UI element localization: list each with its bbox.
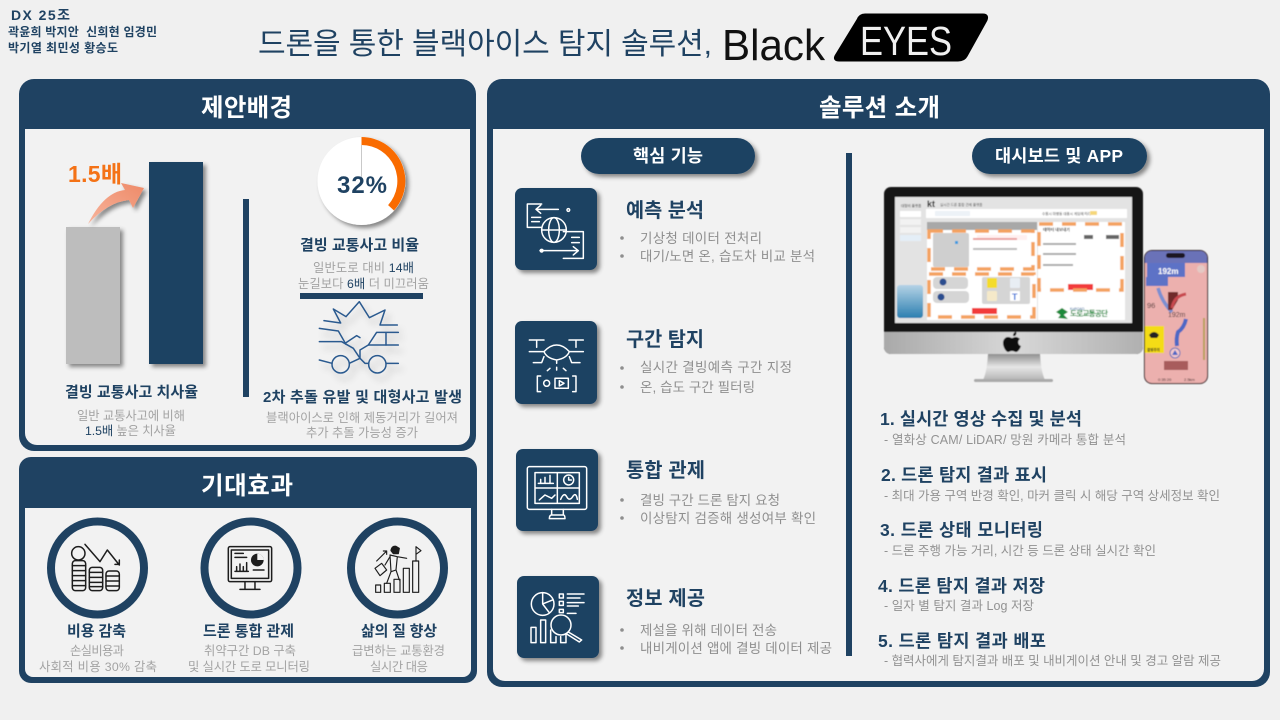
panel: 솔루션 소개 (487, 79, 1270, 687)
donut chart: 32% (318, 137, 406, 225)
icon: data exchange globe (527, 204, 583, 258)
item: 삶의 질 향상: 급변하는 교통환경 (352, 644, 445, 658)
illustration: dashboard on desktop monitor: 대형비 플랫폼 (901, 203, 922, 208)
item: 비용 감축: 손실비용과 (70, 644, 124, 658)
title: Black (722, 21, 826, 70)
illustration: dashboard on desktop monitor: 실시간 드론 통합 관제 플랫폼 (940, 202, 983, 207)
divider (300, 293, 423, 299)
feature: 정보 제공: 제설을 위해 데이터 전송 (640, 623, 777, 638)
text: 결빙 교통사고 치사율: 일반 교통사고에 비해 (77, 409, 185, 423)
divider (243, 199, 249, 397)
pill: 핵심 기능 (581, 138, 755, 174)
team label: 박기열 최민성 황승도 (8, 40, 118, 55)
team label: 곽윤희 박지안 신희현 임경민 (8, 24, 157, 39)
pill: 핵심 기능: 핵심 기능 (633, 146, 703, 166)
list: dashboard functions: 4. 드론 탐지 결과 저장 (878, 576, 1045, 596)
text: 결빙 교통사고 비율 (298, 237, 429, 291)
heading: 솔루션 소개: 솔루션 소개 (819, 94, 940, 122)
item: 삶의 질 향상: 삶의 질 향상 (361, 623, 437, 640)
illustration: dashboard on desktop monitor: T (1012, 292, 1018, 302)
illustration: navigation app on phone: 0:35:20 (1158, 377, 1172, 382)
heading: 기대효과: 기대효과 (201, 472, 293, 500)
feature: 예측 분석: 예측 분석 (626, 200, 704, 222)
text: 2차 추돌 (263, 389, 462, 440)
feature: 구간 탐지: 실시간 결빙예측 구간 지정 (640, 360, 792, 375)
team label (8, 7, 157, 55)
list: dashboard functions: - 드론 주행 가능 거리, 시간 등 드론 상태 실시간 확인 (884, 543, 1156, 558)
text: 결빙 교통사고 치사율: 결빙 교통사고 치사율 (65, 384, 198, 401)
title: 드론을 통한 블랙아이스 탐지 솔루션, (258, 28, 712, 61)
icon: dashboard monitor (527, 467, 587, 519)
text: 결빙 교통사고 치사율 (65, 384, 198, 438)
feature: 통합 관제: 결빙 구간 드론 탐지 요청 (640, 493, 780, 508)
text: 결빙 교통사고 비율: 눈길보다 6배 더 미끄러움 (298, 277, 429, 291)
item: 삶의 질 향상 (351, 522, 445, 674)
icon: drone camera (529, 340, 583, 392)
list: dashboard functions: - 열화상 CAM/ LiDAR/ 망원 카메라 통합 분석 (884, 433, 1126, 447)
icon: car crash (319, 302, 398, 373)
illustration: navigation app on phone: 192m (1158, 267, 1178, 276)
feature: 통합 관제: 이상탐지 검증해 생성여부 확인 (640, 511, 816, 526)
list: dashboard functions: - 협력사에게 탐지결과 배포 및 내비게이션 안내 및 경고 알람 제공 (884, 654, 1221, 668)
feature: 구간 탐지: 구간 탐지 (626, 329, 704, 351)
text: 결빙 교통사고 치사율: 1.5배 높은 치사율 (85, 424, 176, 438)
illustration: navigation app on phone: 192m (1168, 312, 1186, 319)
feature: 정보 제공 (517, 576, 832, 658)
item: 드론 통합 관제 (188, 522, 310, 674)
illustration: navigation app on phone (1144, 250, 1208, 384)
item: 드론 통합 관제: 및 실시간 도로 모니터링 (188, 660, 310, 674)
item: 드론 통합 관제: 취약구간 DB 구축 (204, 643, 296, 658)
icon: coins (72, 544, 119, 591)
feature: 예측 분석: 기상청 데이터 전처리 (640, 231, 762, 246)
item: 드론 통합 관제: 드론 통합 관제 (203, 623, 294, 640)
icon: report magnifier (531, 593, 584, 643)
item: 비용 감축: 사회적 비용 30% 감축 (39, 660, 157, 674)
title: EYES (860, 18, 952, 64)
list: dashboard functions: - 최대 가용 구역 반경 확인, 마커 클릭 시 해당 구역 상세정보 확인 (884, 489, 1220, 503)
text: 결빙 교통사고 비율: 결빙 교통사고 비율 (300, 237, 419, 254)
text: 2차 추돌: 블랙아이스로 인해 제동거리가 길어져 (266, 411, 458, 425)
list: dashboard functions: 3. 드론 상태 모니터링 (880, 520, 1043, 540)
item: 비용 감축: 비용 감축 (67, 623, 126, 640)
feature: 통합 관제: 통합 관제 (626, 460, 705, 482)
icon: person climbing bars (375, 546, 421, 592)
text: 2차 추돌: 추가 추돌 가능성 증가 (306, 426, 418, 440)
feature: 정보 제공: 내비게이션 앱에 결빙 데이터 제공 (640, 641, 832, 656)
panel: 기대효과 (19, 457, 477, 683)
title (258, 15, 987, 70)
item: 비용 감축 (39, 522, 157, 674)
illustration: dashboard on desktop monitor: kt (927, 199, 935, 209)
text: 2차 추돌: 2차 추돌 유발 및 대형사고 발생 (263, 389, 462, 406)
pill: 대시보드 및 APP (972, 138, 1147, 174)
feature: 정보 제공: 정보 제공 (626, 588, 705, 610)
feature: 예측 분석 (515, 188, 815, 270)
illustration: dashboard on desktop monitor: 도로교통공단 (1070, 308, 1108, 318)
donut chart: 32%: 32% (337, 172, 387, 199)
list: dashboard functions: - 일자 별 탐지 결과 Log 저장 (884, 599, 1034, 613)
list: dashboard functions: 2. 드론 탐지 결과 표시 (881, 465, 1047, 485)
feature: 통합 관제 (516, 449, 816, 531)
heading: 제안배경: 제안배경 (201, 94, 292, 122)
text: 결빙 교통사고 비율: 일반도로 대비 14배 (313, 261, 414, 275)
feature: 구간 탐지: 온, 습도 구간 필터링 (640, 380, 755, 395)
feature: 예측 분석: 대기/노면 온, 습도차 비교 분석 (640, 249, 815, 264)
illustration: dashboard on desktop monitor: KoROAD (1070, 307, 1085, 311)
list: dashboard functions: 5. 드론 탐지 결과 배포 (878, 631, 1046, 651)
bar chart: 치사율 (66, 161, 203, 364)
icon: monitor (228, 547, 272, 589)
illustration: navigation app on phone: 96 (1147, 301, 1155, 310)
team label: DX 25조 (11, 7, 70, 23)
divider (846, 153, 852, 656)
illustration: navigation app on phone: 2.5km (1184, 377, 1196, 382)
list: dashboard functions: 1. 실시간 영상 수집 및 분석 (880, 409, 1082, 429)
illustration: dashboard on desktop monitor: 데이터 내보내기 (1043, 226, 1070, 232)
list: dashboard functions (878, 409, 1221, 668)
illustration: navigation app on phone: 결빙주의 (1147, 347, 1160, 352)
panel: 제안배경 (19, 79, 476, 451)
item: 삶의 질 향상: 실시간 대응 (370, 660, 428, 674)
feature: 구간 탐지 (515, 321, 792, 404)
illustration: dashboard on desktop monitor (884, 187, 1143, 382)
bar chart: 치사율: 1.5배 (68, 161, 122, 187)
pill: 대시보드 및 APP: 대시보드 및 APP (995, 146, 1123, 166)
illustration: dashboard on desktop monitor: 수원시 마병동 대중시 게임에 따라 (1042, 211, 1092, 216)
